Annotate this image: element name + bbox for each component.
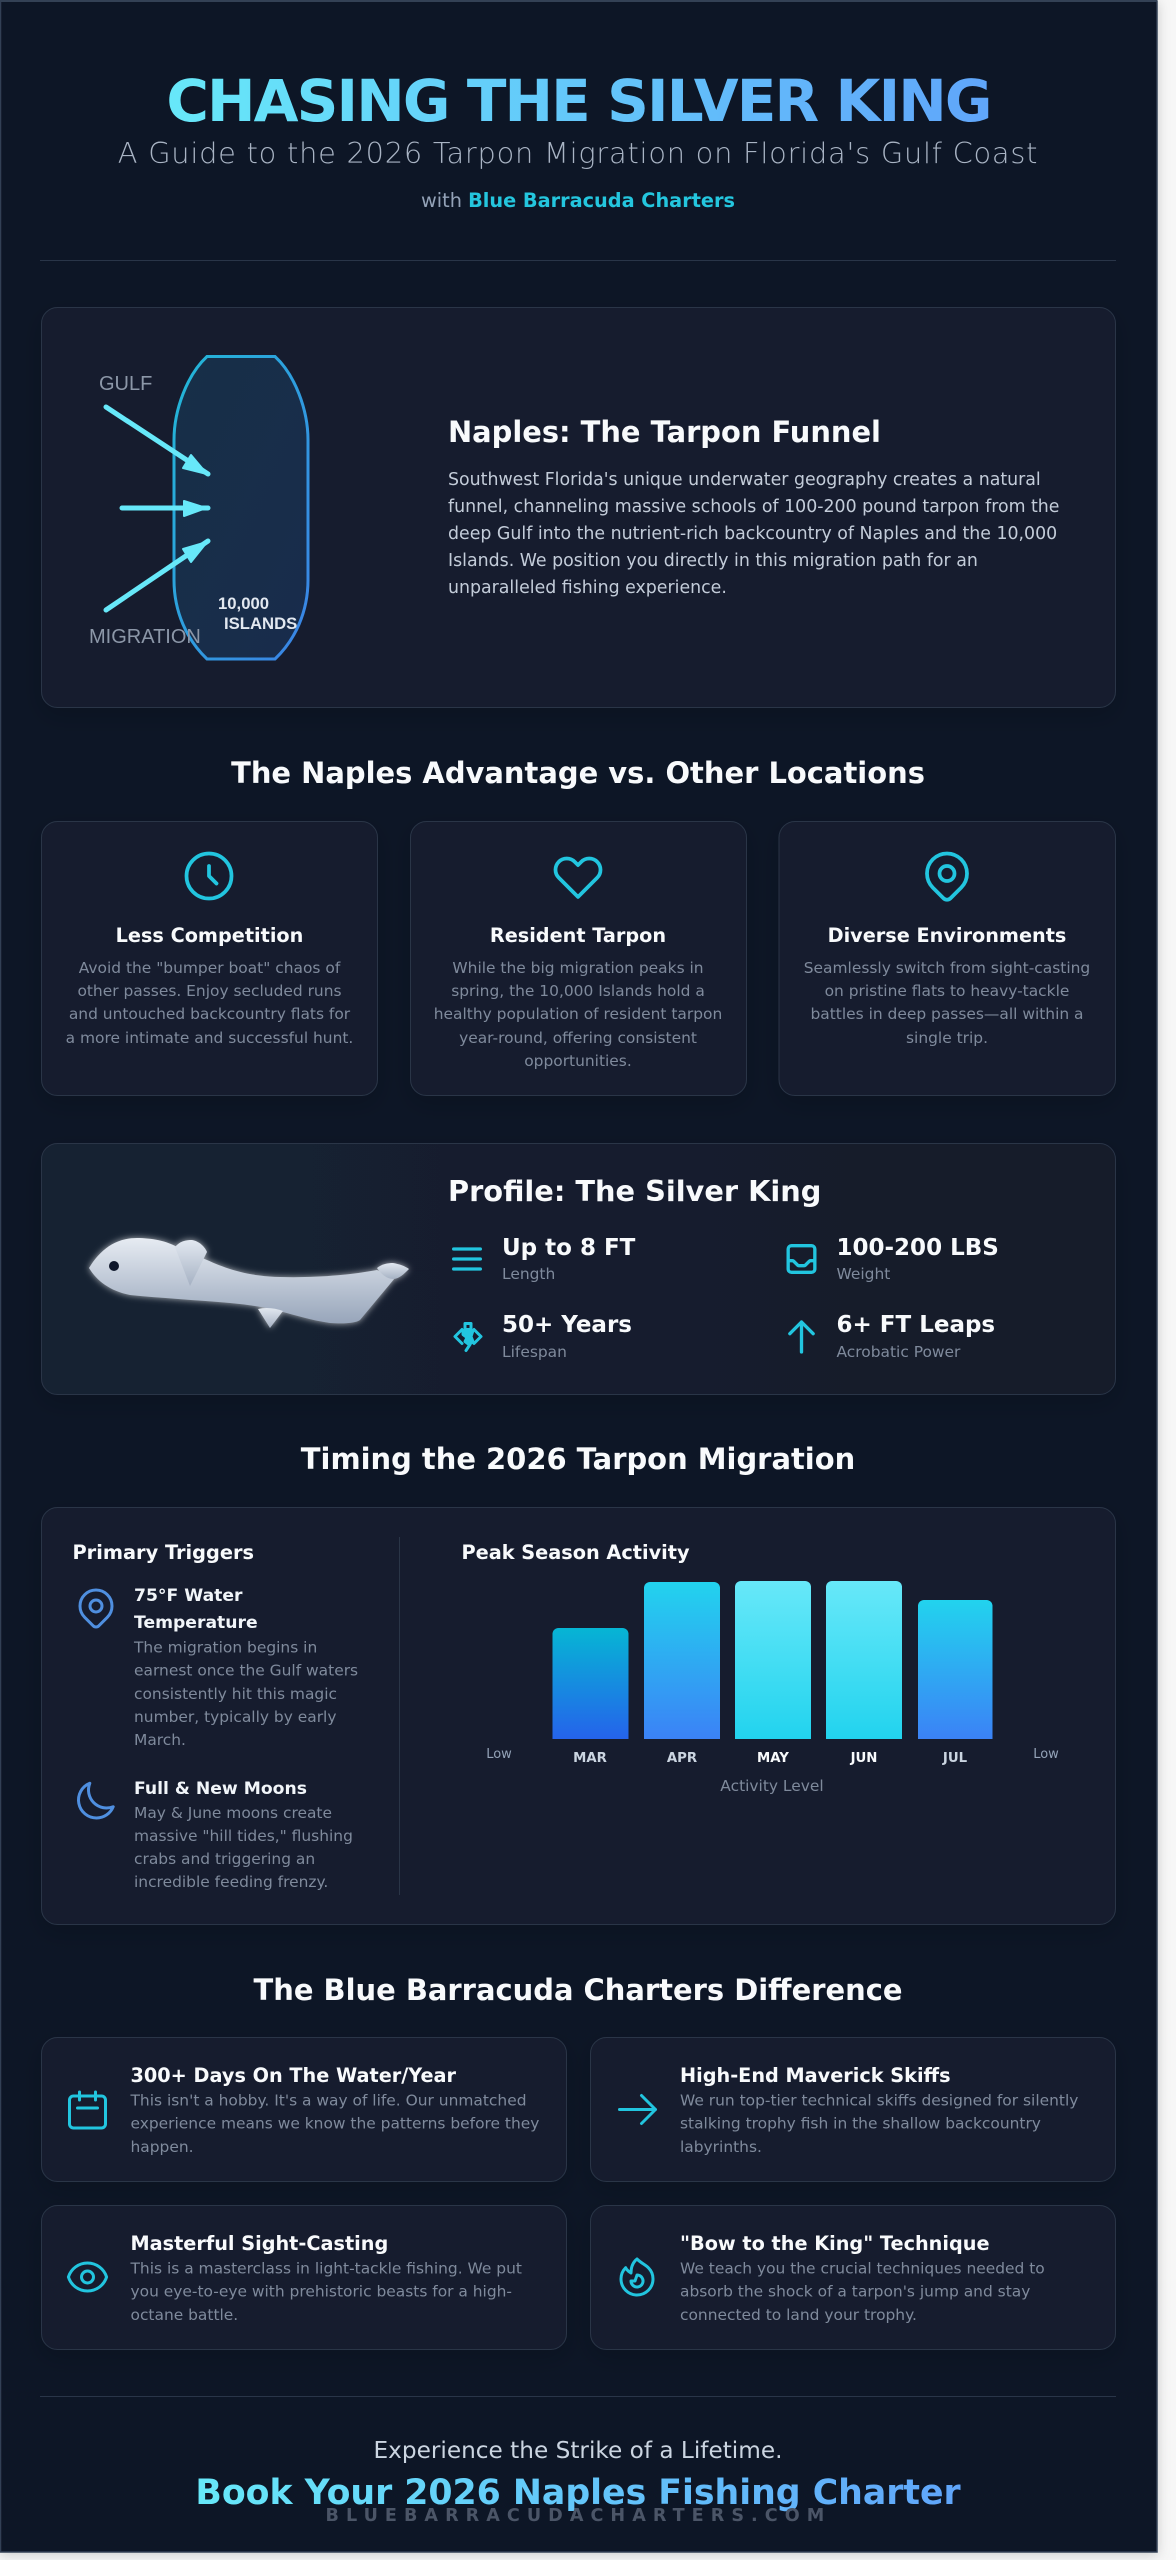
stat: lifespan: 50+ Years bbox=[502, 1312, 632, 1338]
panel: sight casting: This is a masterclass in light-tackle fishing. We put bbox=[130, 2260, 522, 2278]
stat: leaps: 6+ FT Leaps bbox=[836, 1312, 995, 1338]
panel: less competition bbox=[42, 822, 378, 1096]
trigger: moons bbox=[79, 1779, 353, 1891]
trigger: water temperature: Temperature bbox=[134, 1613, 258, 1633]
panel: Naples tarpon funnel bbox=[42, 308, 1116, 708]
panel: timing bbox=[42, 1508, 1116, 1924]
stat: weight: Weight bbox=[836, 1265, 890, 1283]
card title: Less Competition bbox=[116, 924, 303, 947]
card text: spring, the 10,000 Islands hold a bbox=[451, 982, 705, 1000]
panel: 300+ days: This isn't a hobby. It's a way of life. Our unmatched bbox=[130, 2092, 526, 2110]
trigger: water temperature: March. bbox=[134, 1731, 186, 1749]
trigger: moons: crabs and triggering an bbox=[134, 1850, 315, 1868]
stat: weight bbox=[788, 1235, 999, 1283]
card text: other passes. Enjoy secluded runs bbox=[77, 982, 342, 1000]
label: 10,000 islands: ISLANDS bbox=[224, 614, 297, 633]
bar chart: MAY bbox=[757, 1751, 789, 1766]
body copy: funnel, channeling massive schools of 100-200 pound tarpon from the bbox=[448, 497, 1060, 517]
arrow: bottom bbox=[106, 541, 208, 610]
card text: a more intimate and successful hunt. bbox=[66, 1029, 353, 1047]
trigger: moons: Full & New Moons bbox=[134, 1779, 307, 1799]
heading: advantage: The Naples Advantage vs. Other Locations bbox=[231, 756, 925, 790]
icon: arrow right bbox=[618, 2094, 658, 2126]
card text: single trip. bbox=[906, 1029, 988, 1047]
trigger: water temperature: number, typically by early bbox=[134, 1708, 336, 1726]
card title: Diverse Environments bbox=[828, 924, 1066, 947]
title: CHASING THE SILVER KING bbox=[166, 67, 991, 135]
panel: 300+ days: happen. bbox=[130, 2138, 194, 2156]
panel: silver king profile bbox=[42, 1144, 1116, 1394]
tagline: Experience the Strike of a Lifetime. bbox=[374, 2437, 782, 2464]
card text: on pristine flats to heavy-tackle bbox=[825, 982, 1069, 1000]
icon: heart bbox=[554, 856, 602, 899]
illustration: tarpon bbox=[89, 1238, 409, 1328]
bar chart: JUL bbox=[942, 1751, 968, 1766]
trigger: moons: incredible feeding frenzy. bbox=[134, 1873, 328, 1891]
bar chart: APR bbox=[667, 1751, 697, 1766]
footer call to action bbox=[195, 2437, 961, 2526]
trigger: water temperature: 75°F Water bbox=[134, 1586, 243, 1606]
card text: Avoid the "bumper boat" chaos of bbox=[79, 959, 341, 977]
panel: resident tarpon bbox=[410, 822, 746, 1096]
header bbox=[118, 67, 1038, 212]
bar chart: Activity Level bbox=[720, 1777, 824, 1795]
bar chart: JUN bbox=[850, 1751, 877, 1766]
trigger: water temperature: consistently hit this magic bbox=[134, 1685, 337, 1703]
bar chart: MAR bbox=[573, 1751, 607, 1766]
panel: bow to the king: connected to land your trophy. bbox=[680, 2306, 917, 2324]
body copy: Southwest Florida's unique underwater geography creates a natural bbox=[448, 470, 1041, 490]
panel: skiffs: labyrinths. bbox=[680, 2138, 762, 2156]
arrow: middle bbox=[122, 501, 208, 516]
card text: opportunities. bbox=[524, 1052, 632, 1070]
stat: lifespan: Lifespan bbox=[502, 1343, 567, 1361]
stat: leaps bbox=[790, 1312, 995, 1361]
panel: bow to the king: We teach you the crucial techniques needed to bbox=[680, 2260, 1045, 2278]
stat: length: Up to 8 FT bbox=[502, 1235, 636, 1261]
arrow: top bbox=[106, 407, 208, 474]
trigger: water temperature: earnest once the Gulf waters bbox=[134, 1662, 358, 1680]
label: gulf: GULF bbox=[99, 373, 152, 395]
icon: calendar bbox=[68, 2090, 107, 2130]
cta: Book Your 2026 Naples Fishing Charter bbox=[195, 2473, 961, 2513]
funnel diagram bbox=[89, 356, 308, 659]
card text: year-round, offering consistent bbox=[459, 1029, 697, 1047]
panel: sight casting bbox=[42, 2206, 566, 2350]
stat: leaps: Acrobatic Power bbox=[836, 1343, 961, 1361]
label: migration: MIGRATION bbox=[89, 626, 201, 648]
stat: weight: 100-200 LBS bbox=[836, 1235, 999, 1261]
card text: While the big migration peaks in bbox=[452, 959, 704, 977]
icon: flame bbox=[620, 2257, 654, 2296]
panel: sight casting: octane battle. bbox=[130, 2306, 238, 2324]
label: 10,000 islands: 10,000 bbox=[218, 594, 269, 613]
trigger: moons: May & June moons create bbox=[134, 1804, 332, 1822]
panel: bow to the king: "Bow to the King" Technique bbox=[680, 2232, 990, 2255]
bar chart: Low bbox=[486, 1747, 512, 1762]
panel: 300+ days bbox=[42, 2038, 566, 2182]
panel: sight casting: Masterful Sight-Casting bbox=[130, 2232, 388, 2255]
heading: timing: Timing the 2026 Tarpon Migration bbox=[301, 1442, 855, 1476]
card text: healthy population of resident tarpon bbox=[434, 1005, 722, 1023]
bar chart bbox=[486, 1581, 1059, 1795]
panel: skiffs bbox=[590, 2038, 1116, 2182]
subtitle: A Guide to the 2026 Tarpon Migration on Florida's Gulf Coast bbox=[118, 136, 1038, 170]
trigger: water temperature: The migration begins in bbox=[133, 1638, 317, 1656]
panel: skiffs: We run top-tier technical skiffs designed for silently bbox=[680, 2092, 1078, 2110]
card text: Seamlessly switch from sight-casting bbox=[804, 959, 1090, 977]
panel: skiffs: High-End Maverick Skiffs bbox=[680, 2064, 951, 2087]
trigger: water temperature bbox=[80, 1586, 358, 1749]
panel: diverse environments bbox=[779, 822, 1116, 1096]
panel: bow to the king bbox=[590, 2206, 1116, 2350]
funnel shape bbox=[174, 356, 308, 659]
heading: difference: The Blue Barracuda Charters Difference bbox=[254, 1973, 902, 2007]
heading: Profile: The Silver King bbox=[448, 1174, 821, 1208]
card title: Resident Tarpon bbox=[490, 924, 666, 947]
stat: lifespan bbox=[455, 1312, 632, 1361]
body copy: Islands. We position you directly in this migration path for an bbox=[448, 551, 978, 571]
heading: Naples: The Tarpon Funnel bbox=[448, 415, 881, 449]
icon: map pin bbox=[925, 852, 969, 902]
panel: skiffs: stalking trophy fish in the shallow backcountry bbox=[680, 2114, 1041, 2132]
panel: 300+ days: 300+ Days On The Water/Year bbox=[130, 2064, 456, 2087]
card text: battles in deep passes—all within a bbox=[810, 1005, 1084, 1023]
bar chart: Low bbox=[1033, 1747, 1059, 1762]
stat: length bbox=[454, 1235, 636, 1283]
panel: 300+ days: experience means we know the patterns before they bbox=[130, 2114, 539, 2132]
stat: length: Length bbox=[502, 1265, 555, 1283]
website: BLUEBARRACUDACHARTERS.COM bbox=[326, 2506, 831, 2526]
panel: bow to the king: absorb the shock of a tarpon's jump and stay bbox=[680, 2282, 1030, 2300]
body copy: deep Gulf into the nutrient-rich backcountry of Naples and the 10,000 bbox=[448, 524, 1057, 544]
primary triggers heading: Primary Triggers bbox=[72, 1541, 254, 1564]
icon: eye bbox=[66, 2262, 108, 2292]
byline: with Blue Barracuda Charters bbox=[421, 189, 735, 212]
peak season heading: Peak Season Activity bbox=[462, 1541, 690, 1564]
body copy: unparalleled fishing experience. bbox=[448, 578, 727, 598]
icon: clock bbox=[184, 852, 234, 900]
trigger: moons: massive "hill tides," flushing bbox=[134, 1827, 353, 1845]
card text: and untouched backcountry flats for bbox=[69, 1005, 351, 1023]
panel: sight casting: you eye-to-eye with prehistoric beasts for a high- bbox=[130, 2282, 512, 2300]
